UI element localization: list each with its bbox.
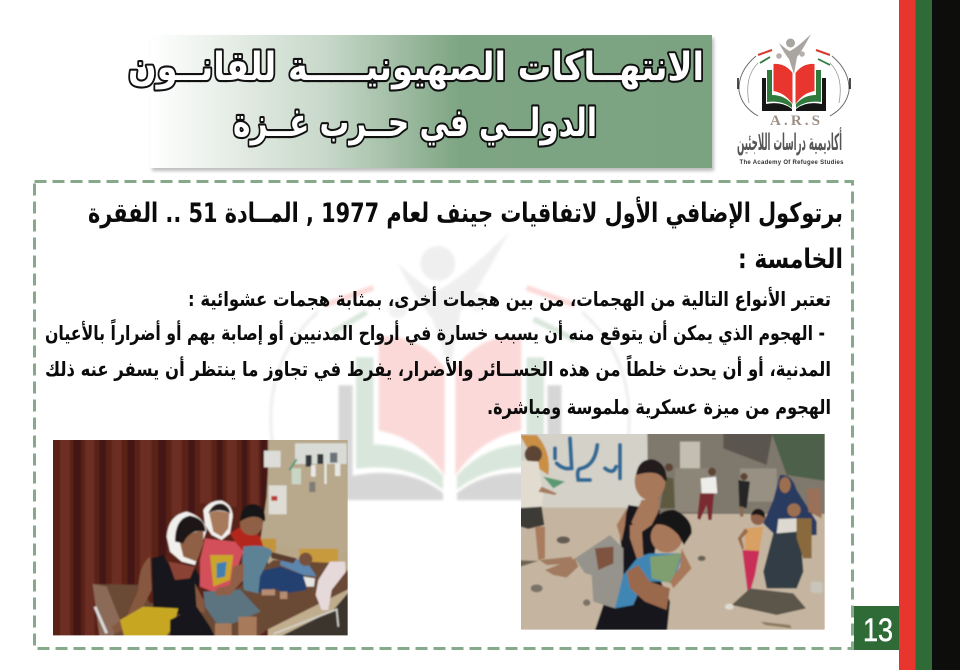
baby <box>280 555 317 577</box>
dashed content frame <box>34 182 852 648</box>
wall graffiti <box>555 438 620 480</box>
title line 2: الدولــي في حــرب غــزة <box>233 101 597 146</box>
side stripes <box>899 0 960 670</box>
girl <box>751 510 765 525</box>
mother and baby <box>763 475 817 537</box>
logo caption: The Academy Of Refugee Studies <box>740 160 844 166</box>
heading text <box>88 196 843 275</box>
body paragraph: الهجوم من ميزة عسكرية ملموسة ومباشرة. <box>487 395 831 419</box>
shadow on ground <box>732 588 806 615</box>
boy red shirt <box>230 526 264 552</box>
photo: injured children in hospital <box>47 433 353 640</box>
watermark logo <box>271 232 629 500</box>
heading text: برتوكول الإضافي الأول لاتفاقيات جينف لعام 1977 , المــادة 51 .. الفقرة <box>88 196 843 229</box>
page number <box>854 606 899 650</box>
logo initials: A.R.S <box>770 113 820 129</box>
photo: boy carrying child through rubble <box>515 428 830 635</box>
body paragraph <box>45 285 831 419</box>
boy pink shirt <box>200 538 243 593</box>
carried child <box>575 535 623 608</box>
man on left <box>525 446 542 463</box>
boy black tank <box>152 555 200 617</box>
older boy <box>593 505 670 635</box>
title line 1: الانتهــاكات الصهيونيـــــة للقانــون <box>128 45 704 90</box>
title banner <box>128 35 714 171</box>
heading text: الخامسة : <box>738 244 843 275</box>
gloved hand <box>316 562 346 610</box>
body paragraph: تعتبر الأنواع التالية من الهجمات، من بين هجمات أخرى، بمثابة هجمات عشوائية : <box>188 285 831 311</box>
page number: 13 <box>863 612 893 648</box>
background people <box>701 477 717 493</box>
logo: Academy of Refugee Studies <box>737 34 850 166</box>
